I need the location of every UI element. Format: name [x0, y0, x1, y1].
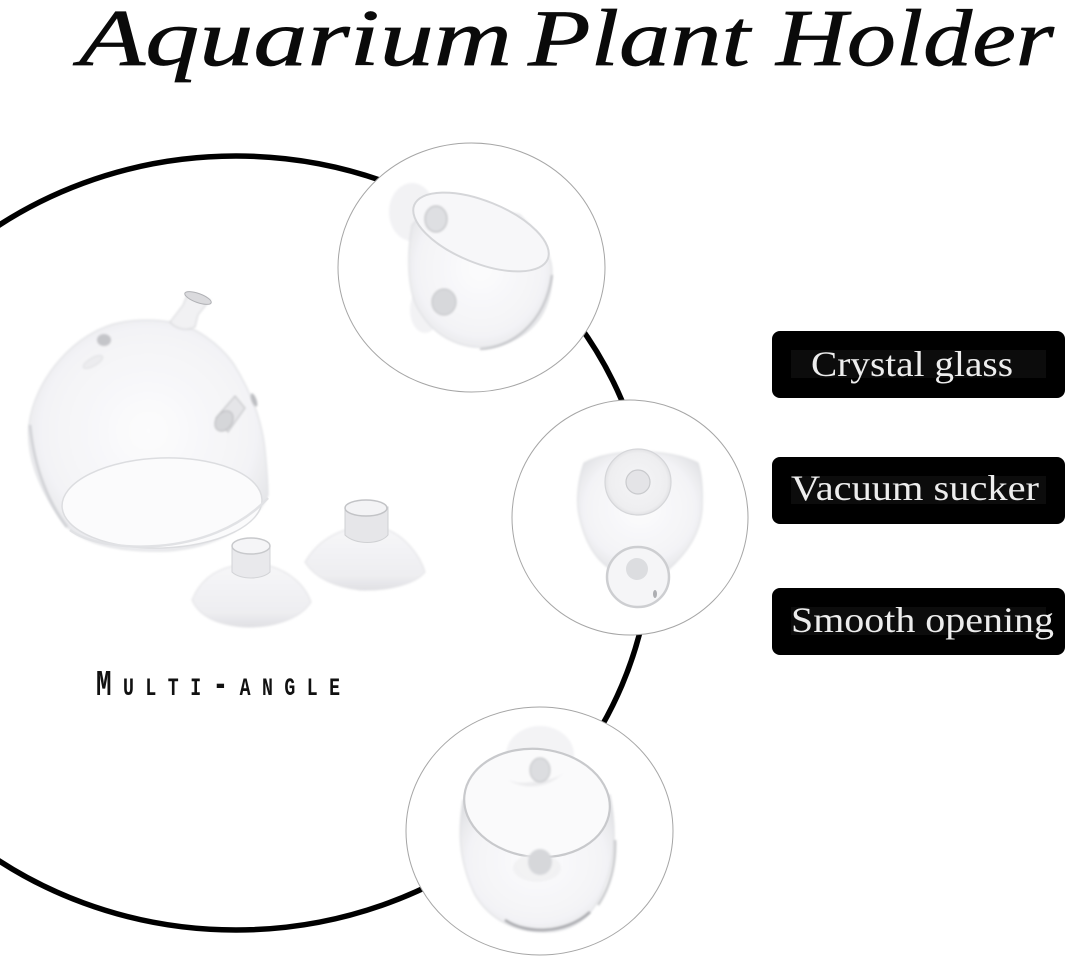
label: crystal glass — [772, 331, 1065, 398]
detail circle 2: back view — [512, 400, 748, 635]
glass nozzle side — [81, 334, 259, 435]
suckers nubs — [425, 206, 456, 315]
detail circle 3: top view — [406, 707, 673, 955]
lower sucker — [607, 547, 669, 607]
glass nozzle top — [170, 289, 213, 329]
upper sucker — [605, 449, 671, 515]
rear sucker discs — [389, 183, 440, 333]
cup rim — [459, 742, 615, 864]
title — [72, 0, 1055, 83]
sucker back — [305, 500, 425, 590]
label: vacuum sucker: Vacuum sucker — [791, 468, 1039, 508]
label: vacuum sucker — [772, 457, 1065, 524]
cup body — [578, 452, 702, 570]
sucker front — [192, 538, 311, 627]
detail circle 1: angled cup view — [338, 143, 605, 392]
label: smooth opening — [772, 588, 1065, 655]
main product: glass cup with suckers — [29, 289, 425, 627]
label: crystal glass: Crystal glass — [811, 344, 1013, 384]
cup body — [460, 795, 614, 932]
large black ring — [0, 156, 651, 930]
glass dome — [29, 320, 268, 551]
cup rim — [403, 176, 559, 288]
label: smooth opening: Smooth opening — [791, 600, 1054, 640]
rear sucker — [506, 726, 574, 784]
suckers nubs — [508, 758, 568, 882]
caption: multi-angle: Multi-angle — [96, 666, 340, 706]
cup body — [409, 195, 552, 347]
